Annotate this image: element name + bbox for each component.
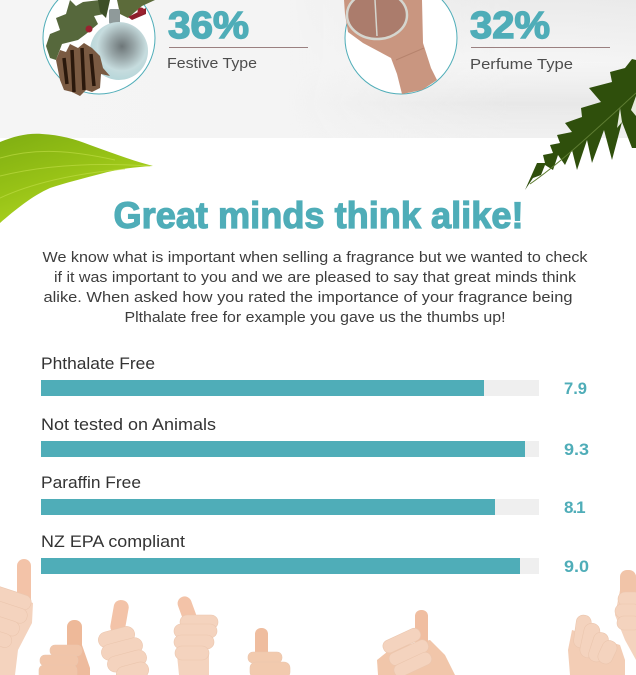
bar: NZ EPA compliant [41, 532, 589, 576]
intro text: alike. When asked how you rated the importance of your fragrance being [44, 289, 572, 306]
intro text [42, 249, 588, 326]
bar: Phthalate Free: Phthalate Free [41, 354, 155, 373]
bar: Phthalate Free [41, 354, 587, 398]
icon: thumb 6 [377, 610, 455, 675]
bar: Paraffin Free: Paraffin Free [41, 473, 141, 492]
divider [471, 47, 610, 48]
bar: Not tested on Animals: 9.3 [564, 440, 589, 459]
bar chart [41, 354, 589, 576]
label: perfume type: Perfume Type [470, 56, 573, 73]
bar: Paraffin Free: 8.1 [564, 498, 585, 517]
bar: Phthalate Free: 7.9 [564, 379, 587, 398]
header background band [0, 0, 636, 138]
bar: NZ EPA compliant: NZ EPA compliant [41, 532, 185, 551]
icon: thumb 7 [568, 614, 625, 675]
icon: thumb 5 [248, 628, 290, 675]
icon: thumb 8 [615, 570, 636, 660]
icon: thumb 1 [0, 559, 33, 675]
bar: Not tested on Animals [41, 415, 589, 459]
icon: thumb 4 [174, 594, 218, 675]
bar: Paraffin Free [41, 473, 585, 517]
intro text: We know what is important when selling a fragrance but we wanted to check [42, 249, 588, 266]
icon: thumb 3 [97, 599, 151, 675]
intro text: Plthalate free for example you gave us the thumbs up! [124, 309, 506, 326]
heading: Great minds think alike! [114, 195, 524, 236]
icon: holly, bauble and pine cone in circle [43, 0, 155, 96]
decoration: green leaf [0, 134, 153, 223]
decoration: fern leaf [525, 59, 636, 190]
bar: NZ EPA compliant: 9.0 [564, 557, 589, 576]
divider [169, 47, 308, 48]
stat: festive type [43, 0, 308, 96]
icon: thumb 2 [39, 620, 90, 675]
label: festive type: Festive Type [167, 55, 257, 72]
intro text: if it was important to you and we are pleased to say that great minds think [54, 269, 577, 286]
thumbs up hands [0, 559, 636, 675]
bar: Not tested on Animals: Not tested on Animals [41, 415, 216, 434]
stat: perfume type [344, 0, 610, 94]
icon: hand holding perfume in circle [344, 0, 457, 94]
value: 32%: 32% [470, 5, 550, 47]
value: 36%: 36% [168, 5, 249, 47]
